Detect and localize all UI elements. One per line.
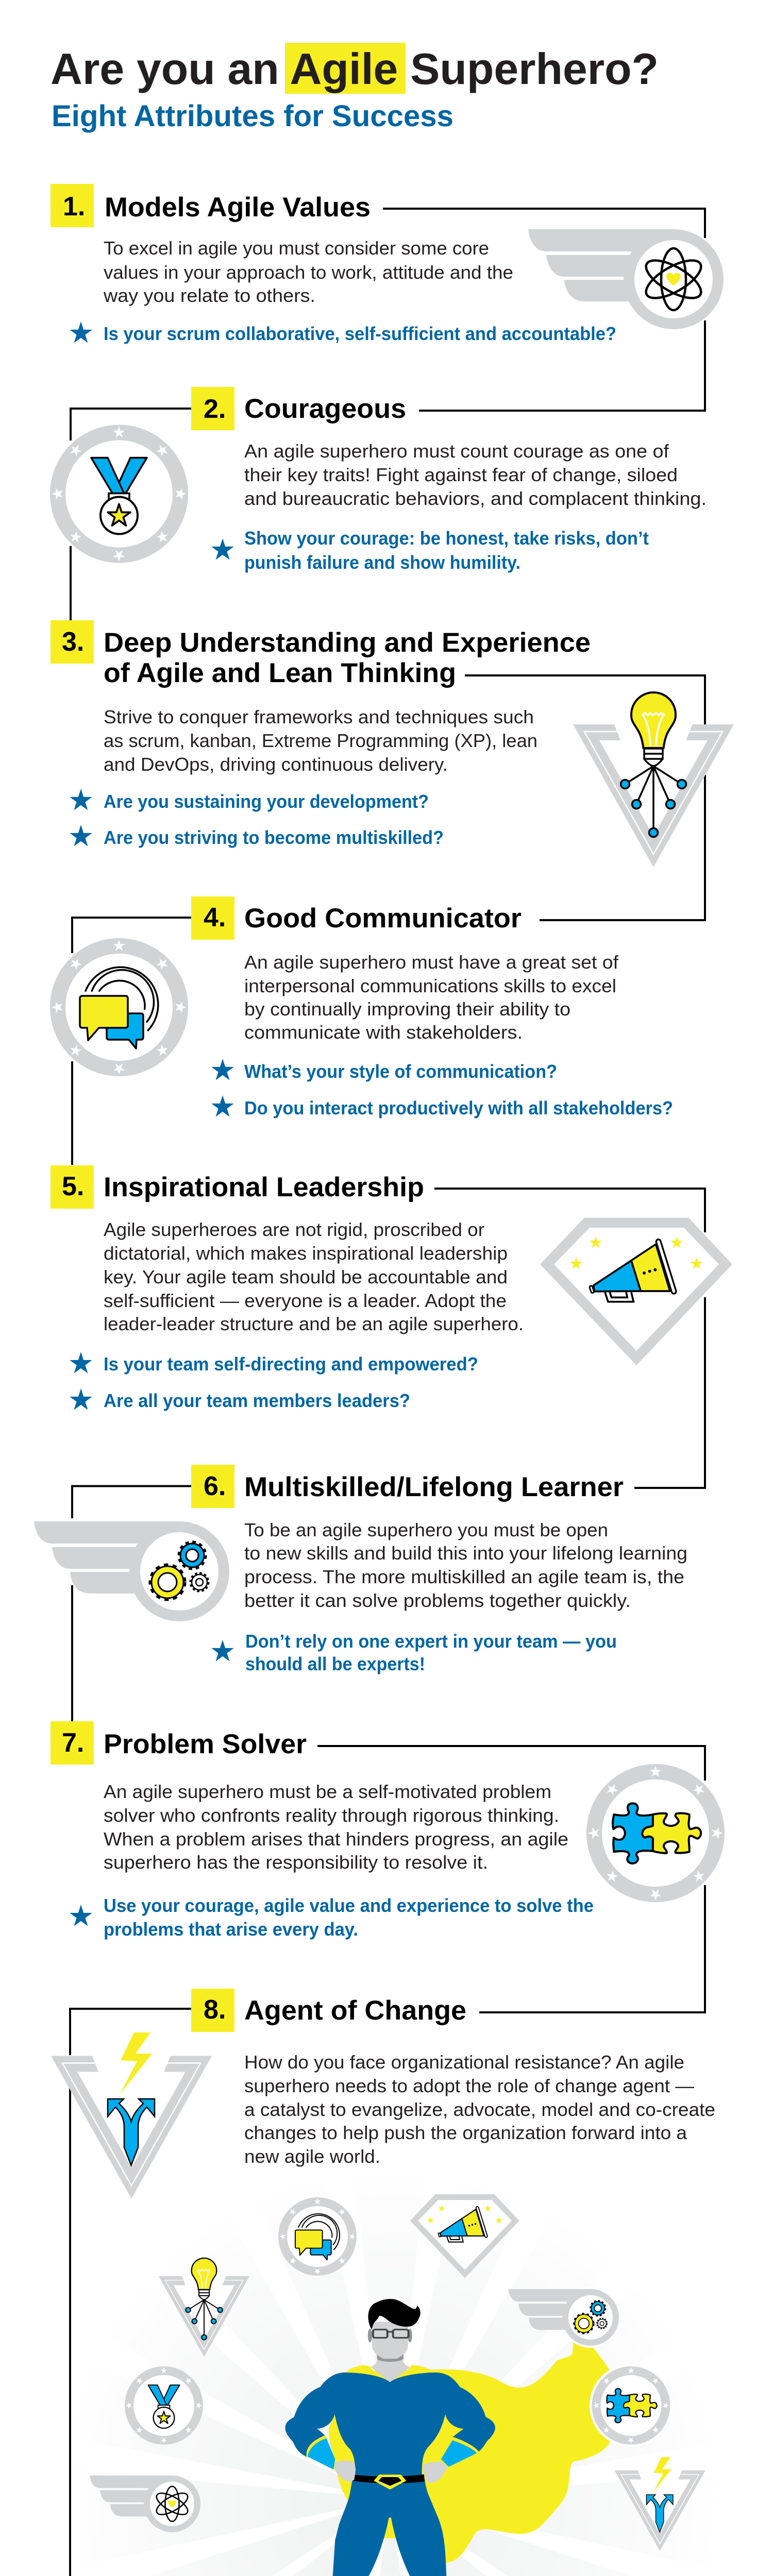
panel: 1 Models Agile Values — [51, 184, 724, 344]
number badge 3 — [51, 620, 94, 664]
number badge 7 — [51, 1721, 94, 1765]
heading 7: Problem Solver — [104, 1729, 307, 1759]
body text 5: leader-leader structure and be an agile superhero. — [104, 1313, 524, 1334]
body text 7: An agile superhero must be a self-motivated problem — [104, 1781, 551, 1802]
body text 4 — [244, 952, 619, 1043]
hero fists — [333, 2460, 448, 2483]
questions 4 — [211, 1059, 673, 1118]
body text 1 — [103, 238, 513, 306]
questions 5: Are all your team members leaders? — [104, 1390, 410, 1411]
number badge 4 — [191, 896, 234, 940]
subtitle: Eight Attributes for Success — [52, 99, 453, 133]
mini icon: gears — [508, 2287, 621, 2348]
questions 3: Are you striving to become multiskilled? — [104, 827, 444, 848]
number badge 2 — [191, 387, 234, 430]
panel: 7 Problem Solver — [51, 1721, 725, 1940]
body text 3: Strive to conquer frameworks and techniques such — [104, 706, 534, 727]
question 7: problems that arise every day. — [104, 1919, 358, 1940]
icon: lightning fork shield — [51, 2032, 212, 2199]
heading 5: Inspirational Leadership — [104, 1172, 424, 1202]
questions 5: Is your team self-directing and empowered? — [104, 1353, 478, 1375]
panel: 3 Deep Understanding — [51, 620, 734, 867]
hero forearms — [305, 2435, 479, 2469]
question 6: Don’t rely on one expert in your team — you — [245, 1631, 617, 1652]
body text 8: changes to help push the organization forward into a — [244, 2122, 687, 2143]
number badge 5: 5. — [62, 1172, 84, 1201]
number badge 6: 6. — [204, 1471, 226, 1501]
body text 7: solver who confronts reality through rigorous thinking. — [104, 1805, 559, 1826]
title: Are you an Agile Superhero? — [51, 45, 659, 94]
body text 2: and bureaucratic behaviors, and complacent thinking. — [244, 488, 707, 509]
icon: winged gears — [34, 1521, 229, 1621]
body text 3: and DevOps, driving continuous delivery. — [104, 754, 448, 775]
heading 1: Models Agile Values — [105, 192, 371, 223]
hero cape — [329, 2343, 610, 2563]
body text 4: interpersonal communications skills to excel — [244, 975, 616, 996]
panel: 2 Courageous — [50, 387, 707, 573]
number badge 1 — [51, 184, 94, 227]
number badge 5 — [51, 1165, 94, 1209]
heading 3 — [104, 628, 591, 688]
body text 6: to new skills and build this into your lifelong learning — [244, 1543, 687, 1564]
number badge 8: 8. — [204, 1995, 226, 2025]
body text 5: key. Your agile team should be accountable and — [104, 1266, 508, 1287]
body text 6: process. The more multiskilled an agile team is, the — [244, 1566, 684, 1587]
body text 5: Agile superheroes are not rigid, proscribed or — [104, 1219, 484, 1240]
body text 6: To be an agile superhero you must be open — [244, 1519, 608, 1540]
number badge 4: 4. — [204, 903, 226, 933]
question 2 — [211, 528, 649, 573]
sunburst rays — [207, 2317, 573, 2576]
body text 2: An agile superhero must count courage as one of — [244, 440, 669, 462]
heading 8: Agent of Change — [244, 1995, 466, 2026]
panel: 8 Agent of Change — [51, 1989, 715, 2199]
body text 4: by continually improving their ability to — [244, 998, 570, 1020]
body text 1: values in your approach to work, attitude and the — [104, 262, 513, 283]
question 1: Is your scrum collaborative, self-sufficient and accountable? — [104, 323, 616, 344]
icon: puzzle — [586, 1764, 725, 1902]
icon: winged atom — [528, 229, 724, 329]
hero torso and legs — [320, 2414, 458, 2576]
body text 8: superhero needs to adopt the role of change agent — — [244, 2075, 695, 2096]
heading 2: Courageous — [244, 394, 406, 424]
questions 3: Are you sustaining your development? — [104, 791, 429, 812]
body text 8: new agile world. — [244, 2146, 380, 2167]
body text 1: way you relate to others. — [103, 285, 315, 306]
heading 4: Good Communicator — [244, 903, 522, 934]
body text 6: better it can solve problems together quickly. — [244, 1590, 631, 1611]
mini icon: speech bubbles — [278, 2197, 357, 2276]
mini icon: lightbulb — [159, 2258, 249, 2357]
body text 5: dictatorial, which makes inspirational leadership — [104, 1243, 508, 1264]
question 7: Use your courage, agile value and experience to solve the — [104, 1895, 594, 1916]
question 6 — [211, 1631, 617, 1674]
body text 3: as scrum, kanban, Extreme Programming (XP), lean — [104, 730, 537, 751]
panel: 6 Multiskilled — [34, 1465, 687, 1674]
question 2: Show your courage: be honest, take risks, don’t — [244, 528, 649, 549]
questions 5 — [70, 1352, 478, 1411]
mini icon: megaphone — [410, 2194, 519, 2278]
number badge 6 — [191, 1465, 234, 1508]
body text 8: a catalyst to evangelize, advocate, model and co-create — [244, 2099, 715, 2120]
questions 3 — [70, 789, 444, 848]
body text 7: superhero has the responsibility to resolve it. — [104, 1852, 488, 1873]
panel: 4 Good Communicator — [50, 896, 673, 1118]
body text 1: To excel in agile you must consider some core — [104, 238, 489, 259]
icon: medal — [50, 425, 188, 563]
questions 4: What’s your style of communication? — [244, 1061, 557, 1082]
body text 2: their key traits! Fight against fear of change, siloed — [244, 464, 678, 485]
question 2: punish failure and show humility. — [244, 552, 520, 573]
heading 6: Multiskilled/Lifelong Learner — [244, 1472, 624, 1502]
mini icon: atom — [90, 2476, 200, 2532]
mini icon: fork — [614, 2457, 705, 2551]
icon: speech bubbles — [50, 938, 188, 1076]
body text 4: communicate with stakeholders. — [244, 1022, 523, 1043]
body text 5: self-sufficient — everyone is a leader. Adopt the — [104, 1290, 507, 1311]
body text 5 — [104, 1219, 524, 1334]
body text 4: An agile superhero must have a great set of — [244, 952, 619, 973]
hero chest and arms — [285, 2372, 495, 2456]
body text 6 — [244, 1519, 687, 1611]
heading 3: of Agile and Lean Thinking — [104, 658, 456, 688]
heading 3: Deep Understanding and Experience — [104, 628, 591, 658]
connector lines — [70, 209, 705, 2576]
mini icon: puzzle — [590, 2364, 673, 2447]
body text 8: How do you face organizational resistance? An agile — [244, 2052, 684, 2073]
number badge 8 — [191, 1989, 234, 2032]
number badge 7: 7. — [62, 1728, 84, 1758]
panel: 5 Inspirational Leadership — [51, 1165, 732, 1411]
body text 3 — [104, 706, 537, 775]
hero belt — [352, 2475, 425, 2489]
number badge 1: 1. — [63, 192, 85, 222]
hero collar — [345, 2365, 433, 2378]
questions 4: Do you interact productively with all stakeholders? — [244, 1097, 673, 1118]
body text 8 — [244, 2052, 715, 2167]
body text 7 — [104, 1781, 568, 1873]
number badge 3: 3. — [62, 627, 84, 657]
question 6: should all be experts! — [245, 1653, 425, 1674]
number badge 2: 2. — [204, 394, 226, 424]
icon: lightbulb shield — [573, 692, 734, 867]
body text 2 — [244, 440, 707, 509]
hero neck and face — [368, 2299, 421, 2382]
body text 7: When a problem arises that hinders progress, an agile — [104, 1828, 568, 1850]
question 7 — [70, 1895, 594, 1940]
superhero figure — [285, 2299, 610, 2576]
icon: megaphone diamond — [540, 1218, 732, 1365]
mini icon: medal — [125, 2366, 203, 2445]
